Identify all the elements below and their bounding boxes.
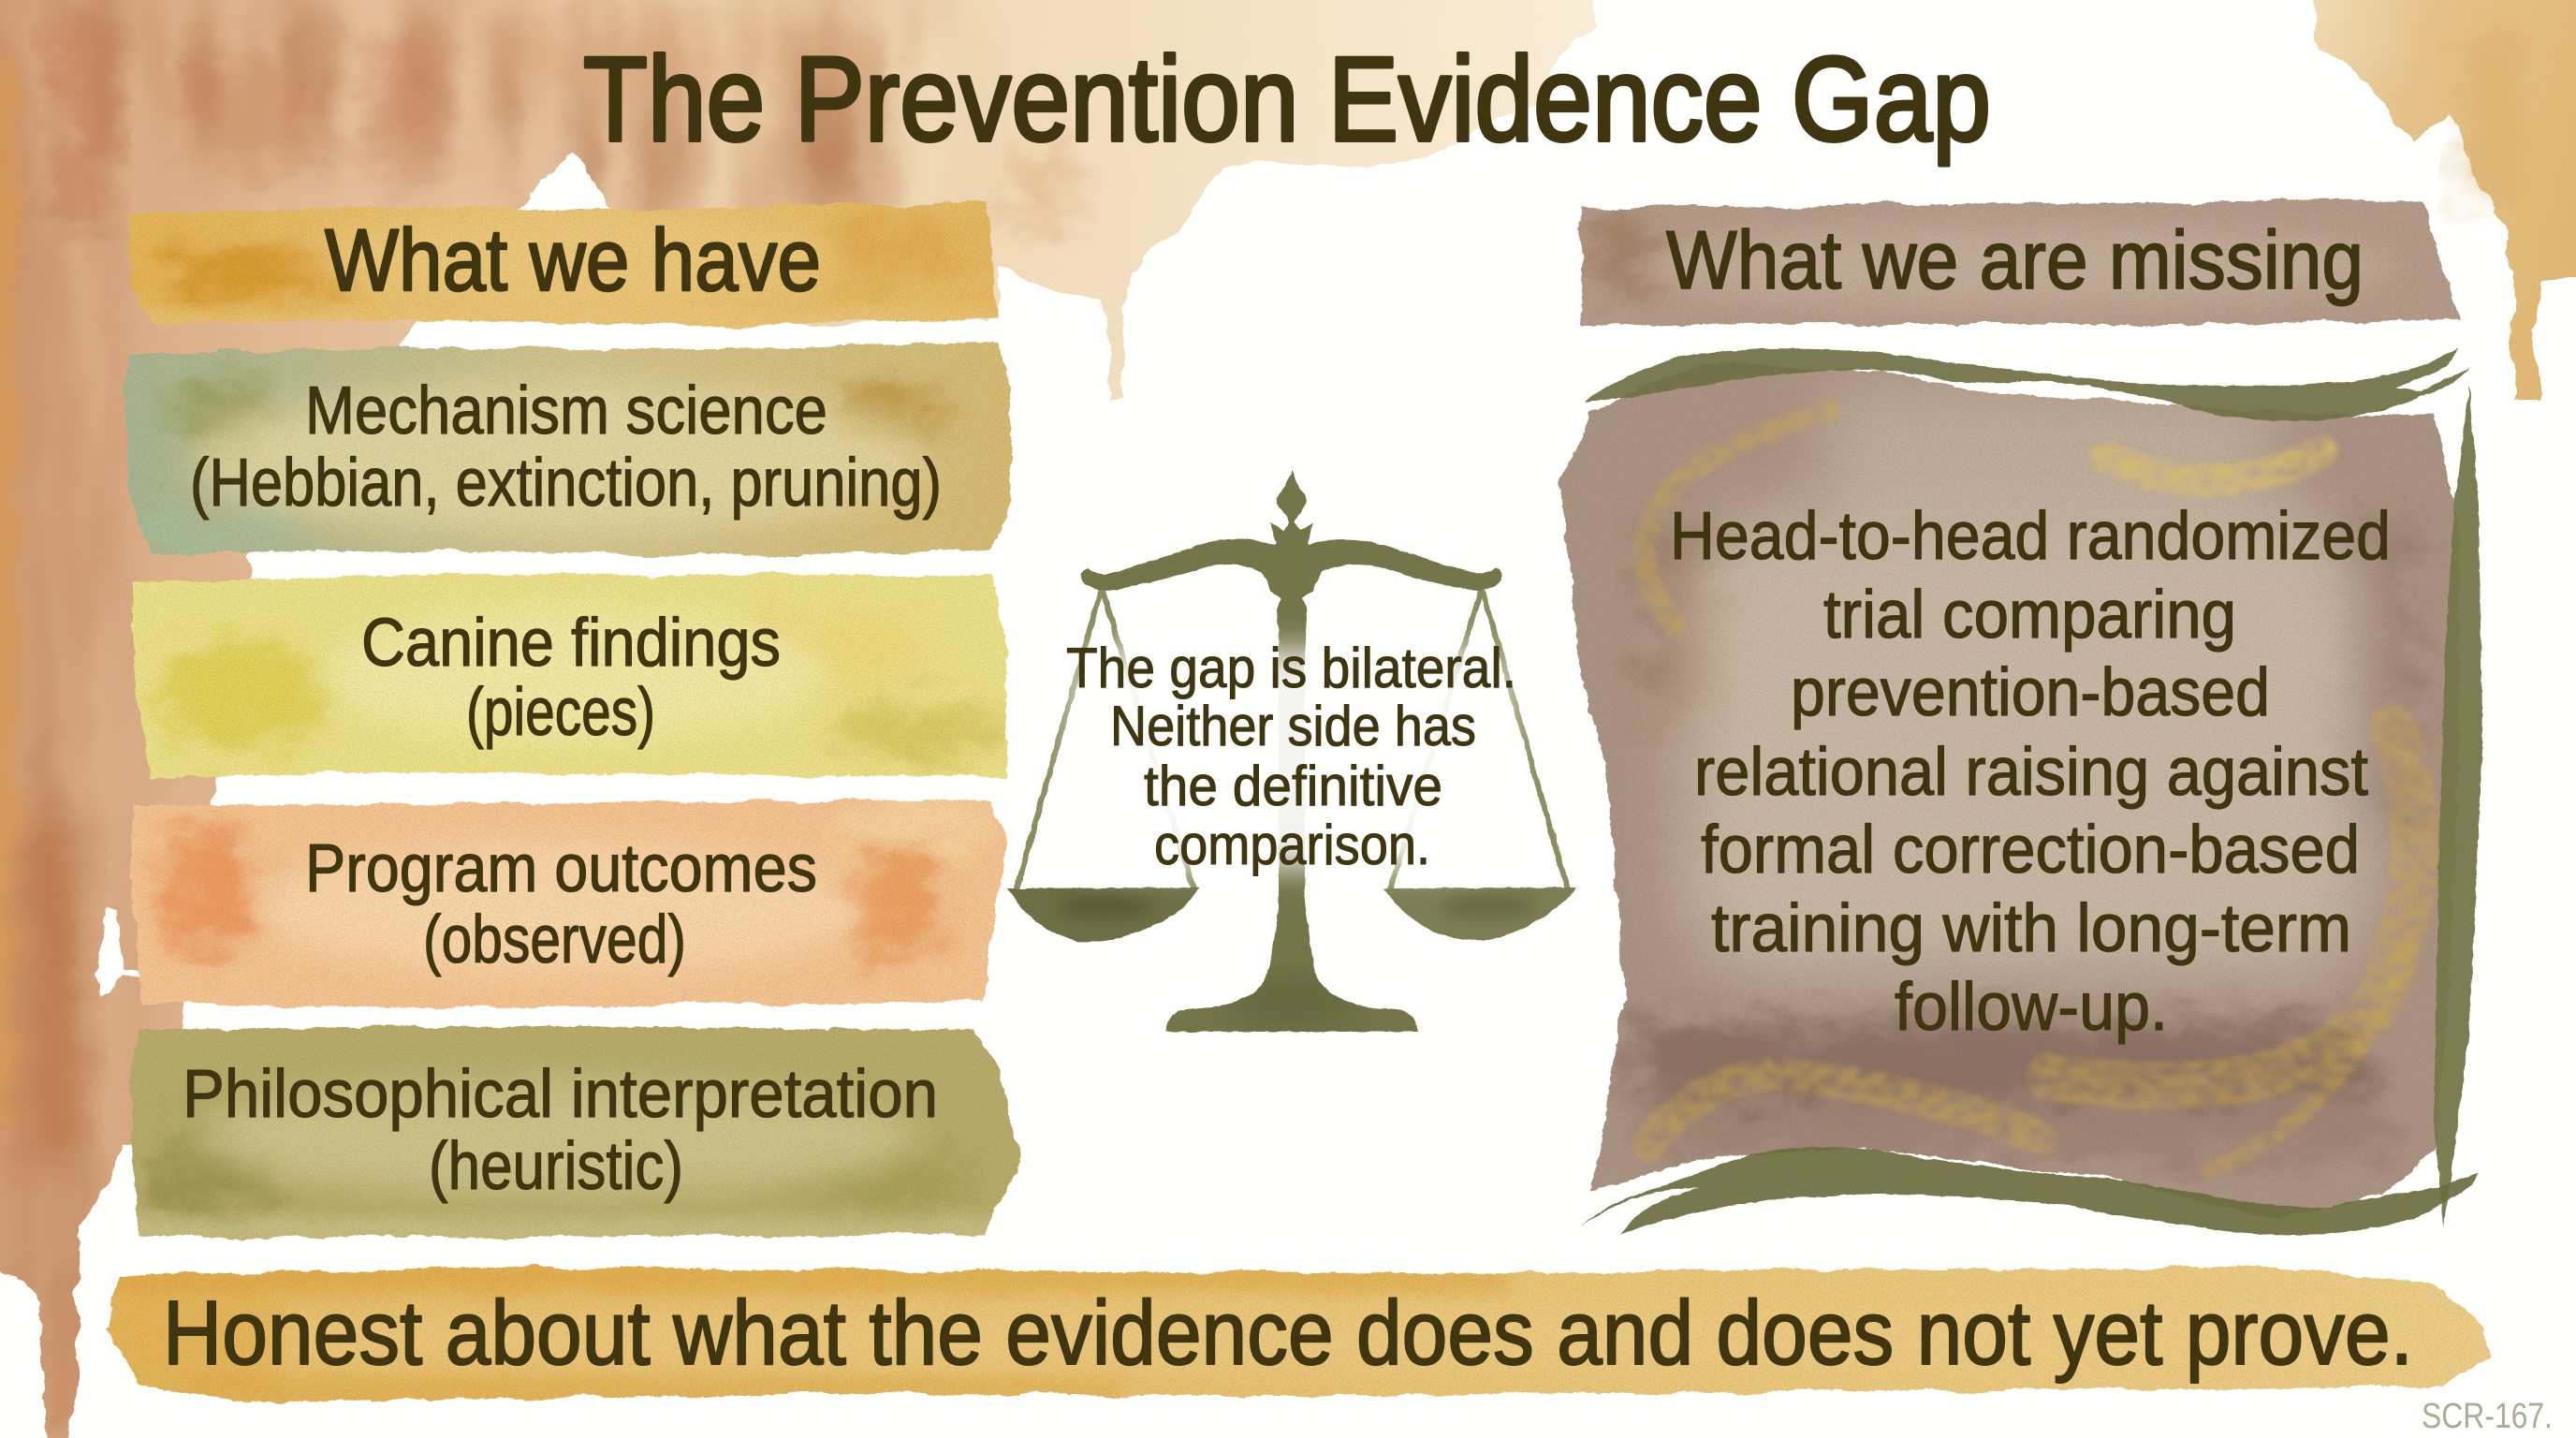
heading band: what we are missing	[1554, 187, 2490, 337]
panel: what we are missing	[1535, 187, 2490, 1236]
callout: the gap is bilateral: comparison.	[1154, 814, 1430, 876]
watercolor wash: top and left	[0, 0, 1647, 1438]
wash gaps: white notches	[97, 154, 613, 989]
heading band: what we are missing: What we are missing	[1666, 213, 2364, 306]
card: canine findings: (pieces)	[466, 675, 655, 750]
callout: the gap is bilateral: The gap is bilateral.	[1066, 637, 1516, 699]
panel body: head-to-head trial: prevention-based	[1791, 655, 2270, 730]
card: mechanism science: (Hebbian, extinction, pruning)	[190, 446, 942, 521]
card: philosophical interpretation	[128, 1024, 1021, 1241]
icon: balance scale	[1007, 470, 1576, 1032]
scale strings	[1017, 588, 1568, 889]
card: philosophical interpretation: (heuristic)	[429, 1129, 683, 1204]
card: mechanism science: Mechanism science	[305, 374, 827, 448]
olive border strokes	[1581, 348, 2482, 1235]
panel body: head-to-head trial: trial comparing	[1823, 578, 2236, 653]
scale beam, column and base	[1081, 470, 1502, 1032]
panel body: head-to-head trial: Head-to-head randomized	[1670, 499, 2391, 574]
callout: the gap is bilateral: Neither side has	[1110, 695, 1476, 757]
source code label: SCR-167.	[2422, 1397, 2553, 1436]
panel body: head-to-head trial: formal correction-based	[1701, 813, 2360, 888]
card: canine findings: Canine findings	[361, 606, 781, 681]
panel body: head-to-head trial: relational raising against	[1694, 735, 2368, 810]
card: mechanism science	[122, 341, 1013, 558]
scale shading	[1058, 893, 1535, 1022]
panel body: head-to-head trial	[1535, 346, 2482, 1236]
panel body: head-to-head trial: training with long-term	[1711, 891, 2351, 966]
watercolor wash: top right	[2302, 0, 2576, 404]
title: The Prevention Evidence Gap	[583, 33, 1991, 167]
panel: what we have	[103, 187, 1039, 1255]
panel body: head-to-head trial: follow-up.	[1895, 970, 2168, 1045]
card: canine findings	[131, 571, 1009, 780]
scale pans	[1007, 888, 1199, 942]
callout: the gap is bilateral: the definitive	[1144, 755, 1442, 817]
card: program outcomes: Program outcomes	[305, 831, 817, 906]
card: program outcomes	[129, 798, 1008, 1009]
card: philosophical interpretation: Philosophical interpretation	[183, 1057, 938, 1132]
card: program outcomes: (observed)	[423, 902, 686, 977]
takeaway banner	[94, 1255, 2499, 1414]
gold brush strokes	[1646, 410, 2415, 1170]
heading band: what we have: What we have	[325, 211, 821, 309]
heading band: what we have	[127, 200, 999, 330]
callout: the gap is bilateral	[1066, 637, 1516, 876]
